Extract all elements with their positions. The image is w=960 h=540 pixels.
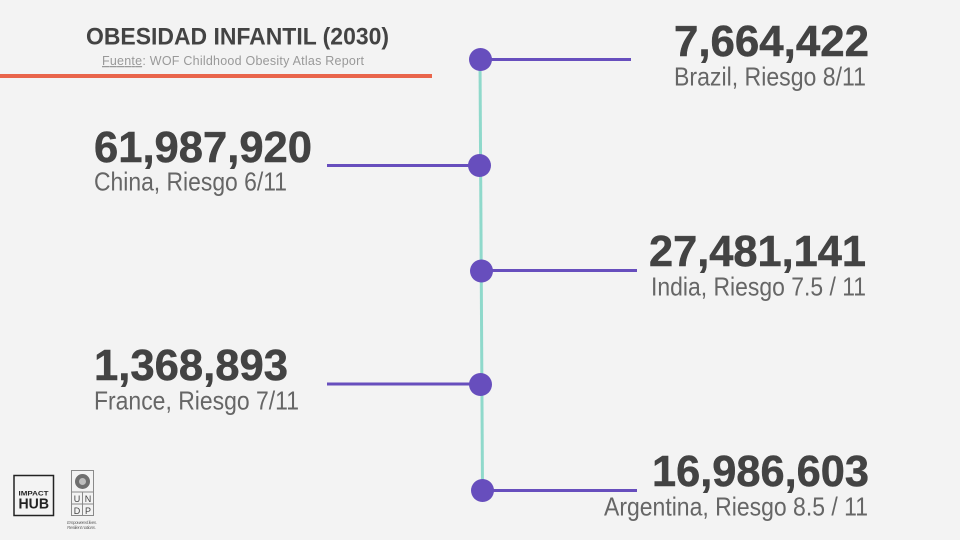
logo: UNDP: Resilient nations. [67, 525, 96, 530]
logo: Impact Hub: IMPACT [18, 490, 49, 498]
entry: China: 61,987,920 [94, 124, 312, 172]
entry: Argentina: Argentina, Riesgo 8.5 / 11 [604, 492, 868, 522]
entry: China: China, Riesgo 6/11 [94, 166, 287, 196]
entry: Argentina [471, 448, 869, 522]
entry: Brazil: Brazil, Riesgo 8/11 [674, 62, 866, 92]
logo: UNDP: N [85, 494, 91, 504]
logo: UNDP: Empowered lives. [67, 520, 97, 525]
logo: Impact Hub: HUB [18, 496, 49, 512]
logo: UNDP [67, 470, 97, 530]
entry: India [470, 228, 866, 302]
entry: India: 27,481,141 [649, 228, 866, 276]
logo: UNDP: P [85, 506, 91, 516]
timeline spine [480, 59, 482, 490]
logo: Impact Hub [14, 476, 54, 516]
title: OBESIDAD INFANTIL (2030) [86, 24, 389, 50]
logo: UNDP: D [74, 506, 81, 516]
entry: India: India, Riesgo 7.5 / 11 [651, 272, 866, 302]
entry: China [94, 124, 491, 196]
entry: Brazil: 7,664,422 [674, 18, 869, 66]
entry: Brazil [469, 18, 869, 92]
entry: France: France, Riesgo 7/11 [94, 386, 299, 416]
entry: Argentina: 16,986,603 [652, 448, 869, 496]
entry: France: 1,368,893 [94, 342, 288, 390]
title rule [0, 74, 432, 78]
logo: UNDP: U [74, 494, 80, 504]
source line: Fuente: WOF Childhood Obesity Atlas Report [102, 54, 365, 68]
entry: France [94, 342, 492, 416]
